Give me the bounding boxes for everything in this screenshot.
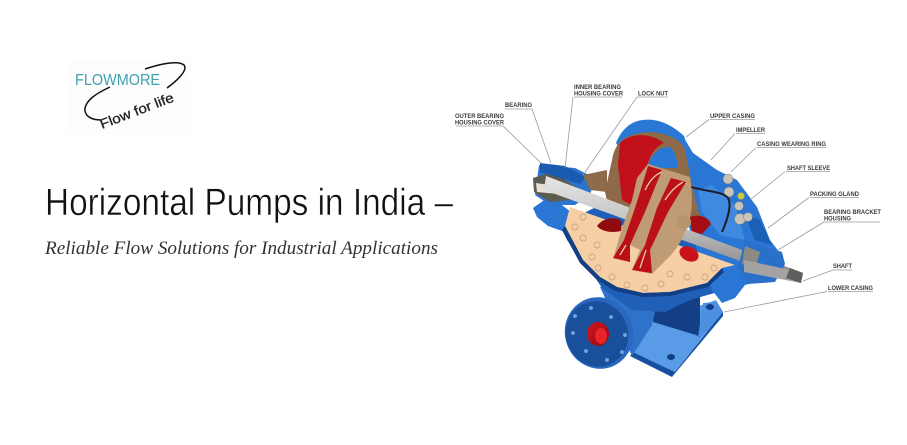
lower casing base foot [630, 296, 723, 377]
part labels and leader lines: CASING WEARING RING [757, 142, 826, 148]
pump cutaway illustration [533, 120, 803, 378]
part labels and leader lines: PACKING GLAND [810, 192, 860, 198]
split-case deck [562, 207, 735, 297]
logo: Flowmore: Flow for life [98, 90, 176, 132]
logo: Flowmore: FLOWMORE [75, 72, 160, 89]
part labels and leader lines: HOUSING [824, 216, 851, 222]
part labels and leader lines: HOUSING COVER [455, 120, 505, 126]
logo: Flowmore [68, 60, 190, 134]
part labels and leader lines: IMPELLER [736, 128, 766, 134]
suction flange [555, 286, 655, 378]
part labels and leader lines: BEARING BRACKET [824, 210, 881, 216]
part labels and leader lines: HOUSING COVER [574, 92, 624, 98]
impeller [613, 164, 692, 274]
part labels and leader lines: INNER BEARING [574, 85, 621, 91]
part labels and leader lines: SHAFT [833, 264, 852, 270]
shaft [544, 176, 803, 283]
part labels and leader lines: BEARING [505, 103, 532, 109]
part labels and leader lines: LOWER CASING [828, 286, 873, 292]
lower casing body [560, 205, 735, 312]
right bearing housing [738, 240, 803, 284]
title: Horizontal Pumps in India – [45, 182, 454, 224]
left bearing housing [533, 163, 607, 205]
upper casing dome [605, 120, 692, 225]
part labels and leader lines: OUTER BEARING [455, 114, 504, 120]
part labels and leader lines: SHAFT SLEEVE [787, 166, 830, 172]
right casing and bolts [672, 133, 785, 303]
part labels and leader lines: LOCK NUT [638, 92, 668, 98]
part labels and leader lines: UPPER CASING [710, 114, 755, 120]
subtitle: Reliable Flow Solutions for Industrial Applications [44, 239, 438, 259]
part labels and leader lines [455, 85, 881, 312]
